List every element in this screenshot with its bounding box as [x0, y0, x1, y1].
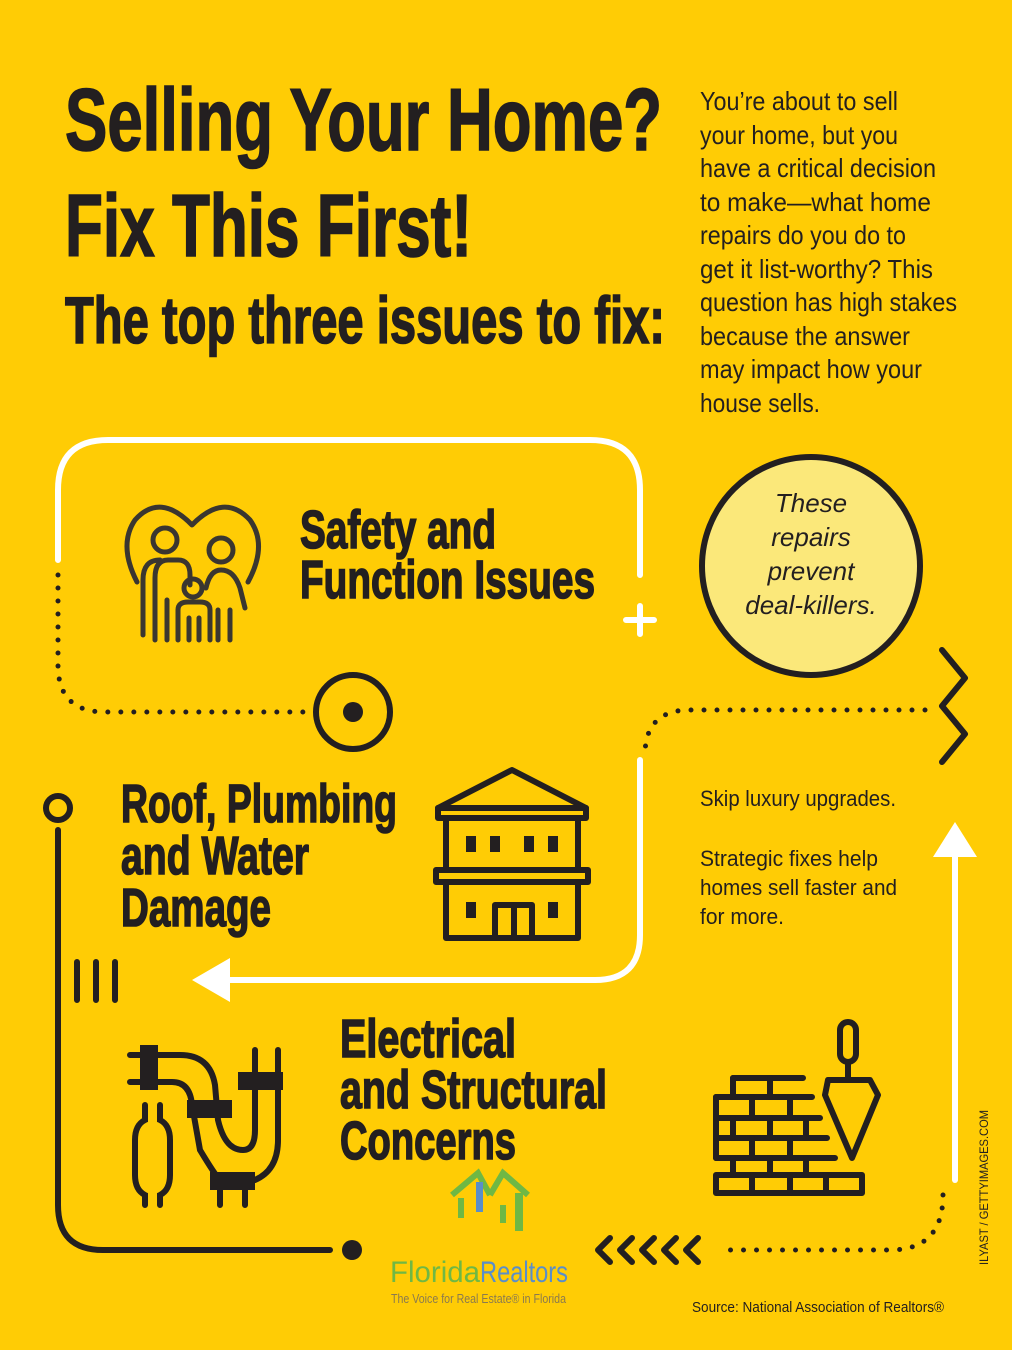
side text: Skip luxury upgrades.: [700, 786, 896, 811]
side text: for more.: [700, 904, 784, 929]
heading: roof: Damage: [121, 878, 271, 938]
intro text: because the answer: [700, 321, 910, 351]
heading: safety: Safety and: [300, 500, 496, 560]
heading: electrical: [340, 1009, 607, 1171]
callout circle: prevent: [767, 556, 856, 586]
callout circle: These: [775, 488, 847, 518]
intro text: house sells.: [700, 388, 820, 418]
intro text: repairs do you do to: [700, 220, 906, 250]
intro text: have a critical decision: [700, 153, 936, 183]
heading: electrical: Concerns: [340, 1111, 516, 1171]
side text: homes sell faster and: [700, 875, 897, 900]
icon: bricks and trowel: [716, 1022, 878, 1193]
arrows: white heads: [192, 822, 977, 1002]
heading: roof: [121, 774, 397, 938]
title: Fix This First!: [65, 176, 472, 275]
logo: Florida Realtors: Florida: [390, 1256, 480, 1289]
credit: ILYAST / GETTYIMAGES.COM: [977, 1110, 991, 1265]
heading: electrical: and Structural: [340, 1060, 607, 1120]
icon: house: [436, 770, 588, 938]
dotted paths: [58, 575, 943, 1250]
intro text: [700, 86, 957, 418]
zigzag: [942, 650, 965, 762]
heading: safety: Function Issues: [300, 550, 595, 610]
intro text: get it list-worthy? This: [700, 254, 933, 284]
source: Source: National Association of Realtors®: [692, 1299, 944, 1316]
intro text: You’re about to sell: [700, 86, 898, 116]
callout circle: repairs: [771, 522, 851, 552]
heading: roof: and Water: [121, 826, 309, 886]
intro text: question has high stakes: [700, 287, 957, 317]
side text: [700, 786, 897, 929]
side text: Strategic fixes help: [700, 846, 878, 871]
heading: safety: [300, 500, 595, 610]
title: [65, 70, 662, 275]
logo: Florida Realtors: Realtors: [480, 1256, 568, 1289]
target circle: [316, 675, 390, 749]
subtitle: The top three issues to fix:: [65, 283, 665, 357]
icon: family heart: [127, 507, 259, 640]
chevrons: [598, 1238, 698, 1262]
heading: roof: Roof, Plumbing: [121, 774, 397, 834]
intro text: may impact how your: [700, 354, 922, 384]
logo: Florida Realtors: The Voice for Real Estate® in Florida: [391, 1291, 567, 1306]
callout circle: [702, 457, 920, 675]
path: white top loop: [58, 440, 955, 1180]
intro text: to make—what home: [700, 187, 931, 217]
icon: pipes and wrench: [130, 1050, 278, 1205]
heading: electrical: Electrical: [340, 1009, 516, 1069]
intro text: your home, but you: [700, 120, 898, 150]
title: Selling Your Home?: [65, 70, 662, 169]
callout circle: deal-killers.: [745, 590, 877, 620]
black left line: [46, 796, 330, 1250]
logo: Florida Realtors: [390, 1173, 568, 1306]
